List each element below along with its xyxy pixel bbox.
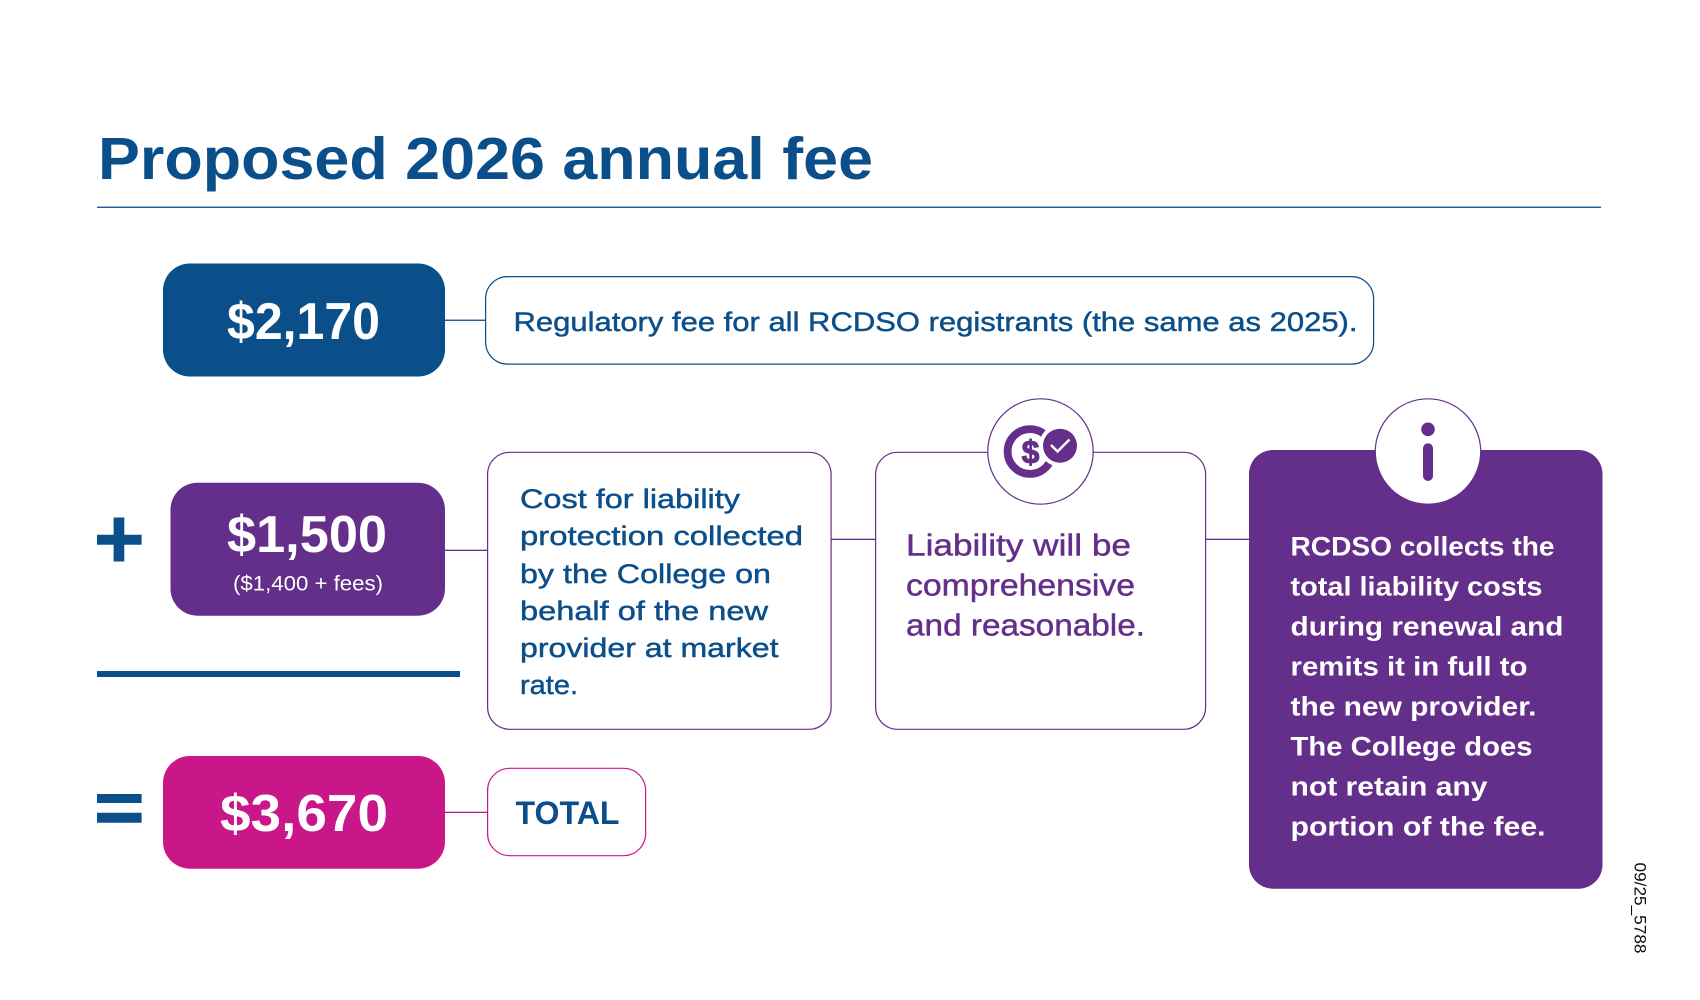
text: remittance explanation: total liability costs bbox=[1290, 572, 1542, 602]
label: total bbox=[488, 768, 646, 856]
amount box: $1,500 bbox=[170, 483, 445, 616]
text: comprehensive and reasonable: and reasonable. bbox=[906, 608, 1145, 642]
description: regulatory fee bbox=[486, 277, 1374, 364]
panel: liability cost description bbox=[488, 452, 831, 729]
title: Proposed 2026 annual fee bbox=[98, 126, 873, 192]
connector: cost to liability bbox=[831, 539, 876, 540]
amount box: $3,670 bbox=[163, 756, 445, 869]
text: comprehensive and reasonable: Liability will be bbox=[906, 528, 1131, 562]
amount box: $1,500: ($1,400 + fees) bbox=[233, 573, 383, 596]
text: remittance explanation: not retain any bbox=[1290, 772, 1488, 802]
description: regulatory fee: Regulatory fee for all RCDSO registrants (the same as 2025). bbox=[514, 307, 1358, 337]
plus sign bbox=[97, 518, 142, 562]
text: remittance explanation: the new provider. bbox=[1290, 692, 1536, 722]
text: comprehensive and reasonable: comprehensive bbox=[906, 568, 1135, 602]
amount box: $1,500: $1,500 bbox=[227, 506, 387, 564]
panel: comprehensive liability bbox=[876, 399, 1206, 729]
icon: dollar with check: $ bbox=[1022, 434, 1040, 470]
label: total: TOTAL bbox=[516, 795, 620, 831]
text: remittance explanation: during renewal and bbox=[1290, 612, 1564, 642]
sum divider bbox=[97, 671, 460, 677]
connector: liability to info panel bbox=[1206, 539, 1250, 540]
text: liability protection: protection collected bbox=[520, 521, 803, 551]
text: comprehensive and reasonable bbox=[906, 528, 1145, 642]
connector: regulatory fee bbox=[445, 320, 486, 321]
document code: 09/25_5788 bbox=[1630, 862, 1648, 954]
amount box: $2,170 bbox=[163, 264, 445, 376]
icon: dollar with check bbox=[988, 399, 1093, 504]
row: regulatory fee bbox=[163, 264, 1374, 376]
text: liability protection: provider at market bbox=[520, 633, 779, 663]
icon: information bbox=[1375, 399, 1481, 504]
text: remittance explanation: remits it in full to bbox=[1290, 652, 1528, 682]
text: liability protection: behalf of the new bbox=[520, 596, 769, 626]
amount box: $3,670: $3,670 bbox=[220, 785, 388, 843]
text: remittance explanation: portion of the fee. bbox=[1290, 812, 1546, 842]
text: liability protection: rate. bbox=[520, 670, 578, 700]
equals sign bbox=[97, 794, 142, 823]
text: liability protection: by the College on bbox=[520, 559, 771, 589]
connector: liability amount bbox=[445, 550, 488, 551]
title rule bbox=[97, 207, 1601, 208]
text: remittance explanation: RCDSO collects the bbox=[1290, 532, 1554, 562]
row: liability amount bbox=[170, 483, 488, 616]
text: remittance explanation: The College does bbox=[1290, 732, 1532, 762]
text: remittance explanation bbox=[1290, 532, 1564, 842]
connector: total bbox=[445, 812, 488, 813]
panel: how fee is collected bbox=[1249, 399, 1602, 889]
row: total bbox=[163, 756, 646, 869]
amount box: $2,170: $2,170 bbox=[227, 293, 380, 351]
text: liability protection bbox=[520, 484, 803, 700]
text: liability protection: Cost for liability bbox=[520, 484, 741, 514]
